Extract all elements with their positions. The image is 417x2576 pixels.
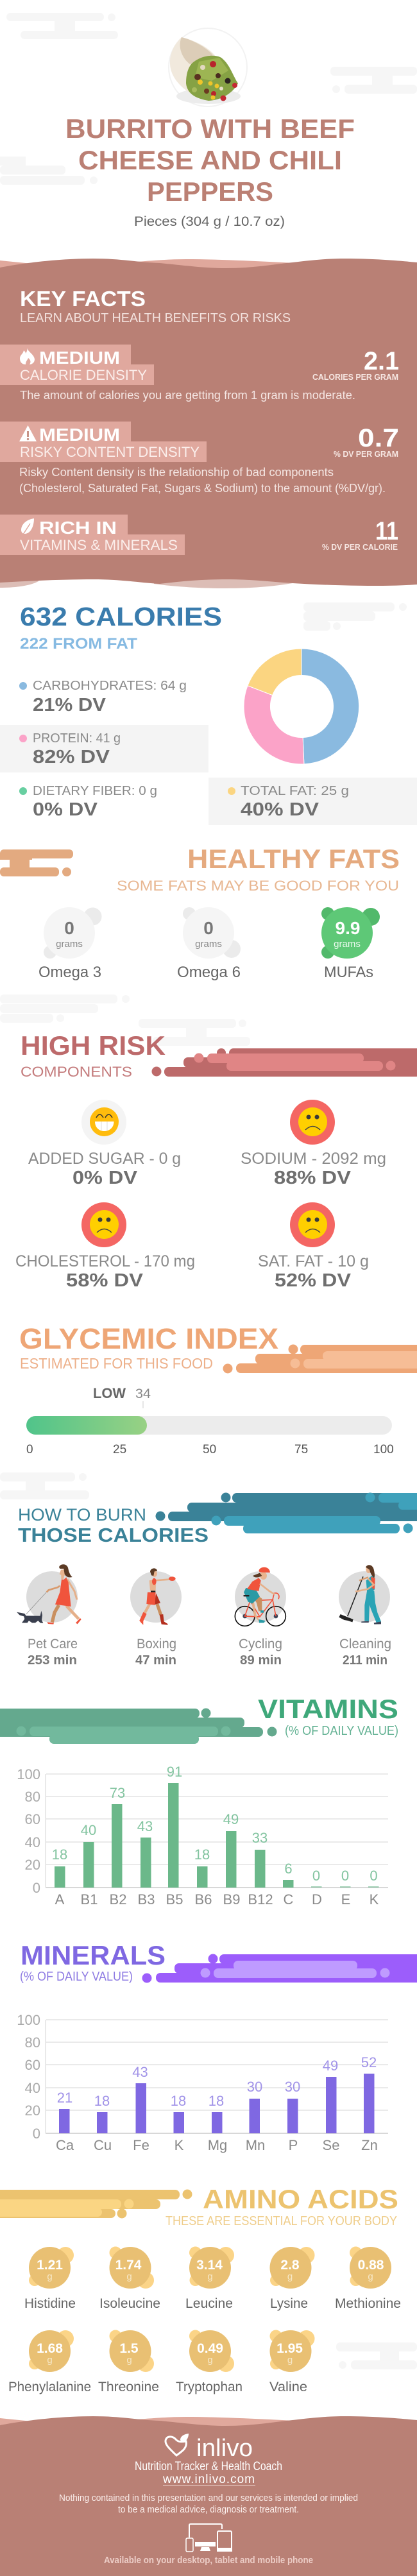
heading: healthy fats — [117, 844, 400, 894]
sodium: 88% DV — [274, 1168, 352, 1188]
bar chart: vitamins: C — [284, 1891, 294, 1907]
bar chart: vitamins: 40 — [25, 1834, 40, 1850]
panel: how to burn those calories — [0, 1472, 417, 1668]
cholesterol — [15, 1202, 195, 1291]
amino: valine — [269, 2330, 314, 2394]
bar chart: vitamins: B2 — [110, 1891, 126, 1907]
amino: leucine: g — [207, 2271, 213, 2282]
decorative header cloud — [223, 1345, 417, 1373]
heading: burn calories: THOSE CALORIES — [18, 1524, 208, 1546]
heading: burn calories — [18, 1505, 208, 1546]
risky content density: % DV PER GRAM — [334, 449, 398, 459]
bar chart: vitamins: 20 — [25, 1857, 40, 1873]
availability note: Available on your desktop, tablet and mobile phone — [104, 2555, 313, 2566]
heading: key facts: LEARN ABOUT HEALTH BENEFITS OR RISKS — [20, 311, 291, 325]
decorative header cloud — [151, 1048, 417, 1077]
bar chart: minerals: 43 — [132, 2064, 148, 2080]
bar chart: vitamins: E — [341, 1891, 350, 1907]
header panel — [0, 13, 417, 229]
amino: phenylalanine: 1.68 — [37, 2341, 63, 2356]
panel: minerals — [17, 1940, 417, 2153]
heading: glycemic index: GLYCEMIC INDEX — [19, 1322, 278, 1355]
heading: key facts: KEY FACTS — [20, 287, 146, 311]
amino: leucine: Leucine — [185, 2296, 233, 2311]
legend: total fat — [208, 778, 417, 825]
mufas: 9.9 — [336, 918, 360, 938]
title: PEPPERS — [147, 176, 273, 207]
amino: leucine: 3.14 — [196, 2258, 223, 2273]
bar chart: vitamins: 60 — [25, 1811, 40, 1827]
bar chart: minerals: 21 — [57, 2090, 72, 2106]
icon: burrito photo — [169, 28, 247, 107]
bar chart: minerals: Ca — [56, 2137, 74, 2153]
icon: boxer — [139, 1568, 176, 1625]
amino: threonine: 1.5 — [119, 2341, 139, 2356]
omega 6: Omega 6 — [177, 964, 241, 981]
donut chart — [244, 649, 359, 764]
heading: glycemic index: ESTIMATED FOR THIS FOOD — [20, 1355, 213, 1372]
bar chart: vitamins: 0 — [341, 1868, 349, 1884]
heading: amino acids: AMINO ACIDS — [203, 2184, 398, 2214]
bar chart: vitamins: 33 — [252, 1830, 268, 1846]
bar chart: vitamins: 0 — [33, 1880, 40, 1896]
bar chart: minerals: 18 — [94, 2093, 110, 2109]
activity: cleaning: 211 min — [343, 1653, 387, 1668]
bar chart: vitamins: B1 — [81, 1891, 98, 1907]
amino: valine: Valine — [269, 2380, 307, 2394]
decorative header cloud — [0, 1708, 277, 1744]
decorative header cloud — [0, 2189, 192, 2219]
bar chart: vitamins: B9 — [223, 1891, 240, 1907]
disclaimer — [59, 2493, 358, 2515]
mufas — [321, 907, 380, 981]
amino: lysine: 2.8 — [280, 2258, 300, 2273]
bar chart: vitamins: B12 — [248, 1891, 273, 1907]
heading: healthy fats: SOME FATS MAY BE GOOD FOR YOU — [117, 878, 399, 894]
disclaimer: to be a medical advice, diagnosis or treatment. — [118, 2504, 299, 2515]
heading: high risk: COMPONENTS — [21, 1064, 132, 1080]
glycemic gauge: 34 — [135, 1386, 151, 1401]
omega 6: grams — [195, 939, 222, 950]
activity: cycling: Cycling — [239, 1637, 282, 1651]
bar chart: vitamins: B3 — [138, 1891, 155, 1907]
heading: vitamins — [258, 1694, 398, 1738]
glycemic gauge: 75 — [294, 1443, 308, 1456]
icon: leaf — [21, 518, 34, 534]
panel: glycemic index — [19, 1322, 417, 1456]
bar chart: vitamins: 6 — [284, 1861, 293, 1877]
calorie density: 2.1 — [364, 347, 399, 375]
heading: calories — [20, 602, 222, 653]
disclaimer: Nothing contained in this presentation and our services is intended or implied — [59, 2493, 358, 2503]
heading: vitamins: (% OF DAILY VALUE) — [285, 1724, 398, 1738]
bar chart: vitamins: 18 — [52, 1847, 67, 1863]
glycemic gauge: 0 — [26, 1443, 33, 1456]
serving size text: Pieces (304 g / 10.7 oz) — [134, 214, 285, 229]
decorative header cloud — [0, 849, 73, 876]
legend: total fat: TOTAL FAT: 25 g — [241, 784, 349, 798]
bar chart: vitamins: 91 — [167, 1764, 182, 1780]
panel: vitamins — [0, 1694, 398, 1907]
bar chart: minerals: 0 — [33, 2126, 40, 2142]
activity: cleaning — [339, 1565, 391, 1668]
calorie density — [0, 345, 399, 402]
omega 6: 0 — [203, 918, 214, 938]
bar chart: vitamins: 18 — [194, 1847, 210, 1863]
amino: histidine: Histidine — [24, 2296, 76, 2311]
activity: pet care: Pet Care — [28, 1637, 78, 1651]
added sugar: 0% DV — [72, 1168, 138, 1188]
glycemic gauge: LOW — [93, 1385, 126, 1401]
bar chart: minerals: P — [289, 2137, 298, 2153]
amino: valine: 1.95 — [277, 2341, 303, 2356]
cholesterol: CHOLESTEROL - 170 mg — [15, 1252, 195, 1270]
amino: lysine: Lysine — [270, 2296, 308, 2311]
calorie density: MEDIUM — [39, 348, 120, 368]
legend: carbohydrates: CARBOHYDRATES: 64 g — [33, 679, 187, 693]
icon: person sweeping — [339, 1565, 381, 1625]
legend: carbohydrates: 21% DV — [33, 695, 106, 715]
activity: boxing — [130, 1568, 182, 1668]
heading: glycemic index — [19, 1322, 278, 1372]
heading: calories: 222 FROM FAT — [20, 635, 137, 653]
legend: protein: 82% DV — [33, 747, 110, 767]
bar chart: minerals: 18 — [208, 2093, 224, 2109]
activity: cleaning: Cleaning — [339, 1637, 391, 1651]
bar chart: minerals: Mg — [208, 2137, 227, 2153]
bar chart: minerals: 52 — [361, 2054, 377, 2070]
activity: pet care: 253 min — [28, 1653, 77, 1668]
saturated fat — [258, 1202, 369, 1291]
legend: carbohydrates — [19, 679, 187, 715]
amino: lysine: g — [287, 2271, 293, 2282]
omega 6 — [177, 907, 241, 981]
bar chart: minerals: 100 — [17, 2012, 40, 2028]
amino: isoleucine: 1.74 — [115, 2258, 142, 2273]
panel: footer — [0, 2416, 417, 2576]
rich in vitamins and minerals: RICH IN — [39, 518, 117, 538]
panel: calories — [0, 602, 417, 825]
legend: protein: PROTEIN: 41 g — [33, 731, 121, 746]
risky content density: 0.7 — [358, 424, 399, 452]
amino: phenylalanine — [8, 2330, 91, 2394]
sodium — [241, 1100, 386, 1188]
amino: isoleucine: g — [126, 2271, 132, 2282]
heading: high risk — [21, 1030, 166, 1080]
amino: methionine: g — [368, 2271, 373, 2282]
rich in vitamins and minerals: VITAMINS & MINERALS — [20, 537, 178, 553]
heading: calories: 632 CALORIES — [20, 602, 222, 631]
panel: high risk components — [0, 994, 417, 1291]
bar chart: minerals: 49 — [323, 2058, 338, 2074]
rich in vitamins and minerals: 11 — [375, 517, 398, 545]
amino: histidine — [24, 2247, 76, 2311]
bar chart: vitamins — [17, 1764, 388, 1907]
added sugar: ADDED SUGAR - 0 g — [28, 1150, 181, 1168]
logo: inlivo — [166, 2434, 253, 2462]
amino: phenylalanine: Phenylalanine — [8, 2380, 91, 2394]
heading: healthy fats: HEALTHY FATS — [187, 844, 400, 874]
bar chart: vitamins: 40 — [81, 1822, 96, 1838]
amino: tryptophan: Tryptophan — [176, 2380, 243, 2394]
risky content density: (Cholesterol, Saturated Fat, Sugars & Sodium) to the amount (%DV/gr). — [19, 482, 386, 495]
mufas: grams — [334, 939, 361, 950]
heading: vitamins: VITAMINS — [258, 1694, 398, 1724]
bar chart: minerals: 30 — [247, 2079, 262, 2095]
sodium: SODIUM - 2092 mg — [241, 1150, 386, 1168]
risky content density — [0, 422, 399, 495]
bar chart: vitamins: D — [312, 1891, 322, 1907]
title — [65, 114, 355, 207]
risky content density: MEDIUM — [39, 425, 120, 445]
amino: histidine: 1.21 — [37, 2258, 63, 2273]
icon: cyclist — [235, 1567, 285, 1626]
activity: cycling: 89 min — [240, 1653, 282, 1668]
rich in vitamins and minerals — [0, 515, 398, 555]
glycemic gauge: 50 — [203, 1443, 216, 1456]
decorative header cloud — [142, 1954, 417, 1983]
amino: isoleucine — [99, 2247, 160, 2311]
heading: high risk: HIGH RISK — [21, 1030, 166, 1061]
glycemic gauge — [26, 1385, 394, 1456]
saturated fat: 52% DV — [275, 1270, 352, 1291]
bar chart: minerals: Mn — [246, 2137, 265, 2153]
title: BURRITO WITH BEEF — [65, 114, 355, 144]
rich in vitamins and minerals: % DV PER CALORIE — [322, 542, 398, 552]
cholesterol: 58% DV — [66, 1270, 144, 1291]
omega 3: Omega 3 — [38, 964, 101, 981]
saturated fat: SAT. FAT - 10 g — [258, 1252, 369, 1270]
amino: threonine — [98, 2330, 159, 2394]
calorie density: The amount of calories you are getting from 1 gram is moderate. — [20, 389, 355, 402]
bar chart: minerals: Zn — [361, 2137, 378, 2153]
bar chart: vitamins: B5 — [166, 1891, 183, 1907]
bar chart: vitamins: K — [370, 1891, 379, 1907]
mufas: MUFAs — [324, 964, 373, 981]
bar chart: minerals: 80 — [25, 2034, 40, 2051]
amino: threonine: Threonine — [98, 2380, 159, 2394]
bar chart: vitamins: 43 — [137, 1818, 153, 1834]
bar chart: minerals: Se — [323, 2137, 339, 2153]
legend: protein — [0, 725, 208, 772]
bar chart: minerals: Fe — [133, 2137, 149, 2153]
amino: methionine: Methionine — [335, 2296, 401, 2311]
risky content density: Risky Content density is the relationship of bad components — [19, 466, 334, 479]
icon: flame — [20, 348, 35, 364]
omega 3: grams — [56, 939, 83, 950]
legend: dietary fiber — [19, 784, 157, 820]
amino: tryptophan: 0.49 — [197, 2341, 223, 2356]
calorie density: CALORIE DENSITY — [20, 367, 147, 383]
bar chart: minerals: 20 — [25, 2103, 40, 2119]
amino: lysine — [269, 2247, 314, 2311]
bar chart: minerals — [17, 2012, 388, 2153]
amino: threonine: g — [126, 2355, 132, 2366]
panel: amino acids — [0, 2184, 417, 2394]
activity: cycling — [235, 1567, 286, 1668]
added sugar — [28, 1100, 181, 1188]
bar chart: vitamins: 80 — [25, 1789, 40, 1805]
bar chart: vitamins: 0 — [370, 1868, 378, 1884]
heading: amino acids — [166, 2184, 398, 2228]
website link: www.inlivo.com — [162, 2473, 255, 2486]
bar chart: minerals: Cu — [94, 2137, 112, 2153]
icon: warning triangle — [19, 425, 37, 441]
calorie density: CALORIES PER GRAM — [312, 372, 398, 382]
legend: dietary fiber: 0% DV — [33, 799, 98, 820]
heading: minerals: (% OF DAILY VALUE) — [20, 1970, 133, 1984]
bar chart: vitamins: 0 — [312, 1868, 320, 1884]
bar chart: vitamins: B6 — [195, 1891, 212, 1907]
bar chart: minerals: 30 — [285, 2079, 300, 2095]
amino: tryptophan: g — [207, 2355, 213, 2366]
omega 3: 0 — [64, 918, 74, 938]
bar chart: vitamins: 49 — [223, 1811, 239, 1827]
amino: valine: g — [287, 2355, 293, 2366]
panel: key facts — [0, 259, 417, 588]
bar chart: minerals: 60 — [25, 2057, 40, 2073]
amino: tryptophan — [176, 2330, 243, 2394]
risky content density: RISKY CONTENT DENSITY — [20, 444, 200, 460]
amino: histidine: g — [47, 2271, 53, 2282]
bar chart: vitamins: A — [55, 1891, 65, 1907]
icon: desktop, tablet and phone — [186, 2524, 232, 2552]
omega 3 — [38, 907, 101, 981]
tagline: Nutrition Tracker & Health Coach — [135, 2460, 282, 2473]
heading: key facts — [20, 287, 291, 325]
heading: amino acids: THESE ARE ESSENTIAL FOR YOUR BODY — [166, 2214, 397, 2228]
glycemic gauge: 100 — [373, 1443, 394, 1456]
amino: methionine: 0.88 — [358, 2258, 384, 2273]
bar chart: minerals: K — [174, 2137, 184, 2153]
heading: minerals — [20, 1940, 166, 1984]
bar chart: minerals: 40 — [25, 2080, 40, 2096]
heading: minerals: MINERALS — [21, 1940, 166, 1970]
heading: burn calories: HOW TO BURN — [18, 1505, 146, 1524]
bar chart: vitamins: 100 — [17, 1766, 40, 1782]
amino: leucine — [185, 2247, 234, 2311]
bar chart: minerals: 18 — [171, 2093, 186, 2109]
amino: phenylalanine: g — [47, 2355, 53, 2366]
title: CHEESE AND CHILI — [78, 145, 342, 175]
activity: boxing: 47 min — [135, 1653, 176, 1668]
bar chart: vitamins: 73 — [110, 1785, 125, 1801]
legend: total fat: 40% DV — [241, 799, 319, 820]
logo: inlivo: inlivo — [196, 2435, 253, 2462]
glycemic gauge: 25 — [113, 1443, 126, 1456]
activity: boxing: Boxing — [137, 1637, 176, 1651]
amino: methionine — [335, 2247, 401, 2311]
amino: isoleucine: Isoleucine — [99, 2296, 160, 2311]
decorative header cloud — [155, 1492, 417, 1533]
activity: pet care — [17, 1564, 81, 1668]
panel: healthy fats — [0, 844, 400, 981]
icon: woman walking dog — [17, 1564, 81, 1625]
legend: dietary fiber: DIETARY FIBER: 0 g — [33, 784, 157, 798]
